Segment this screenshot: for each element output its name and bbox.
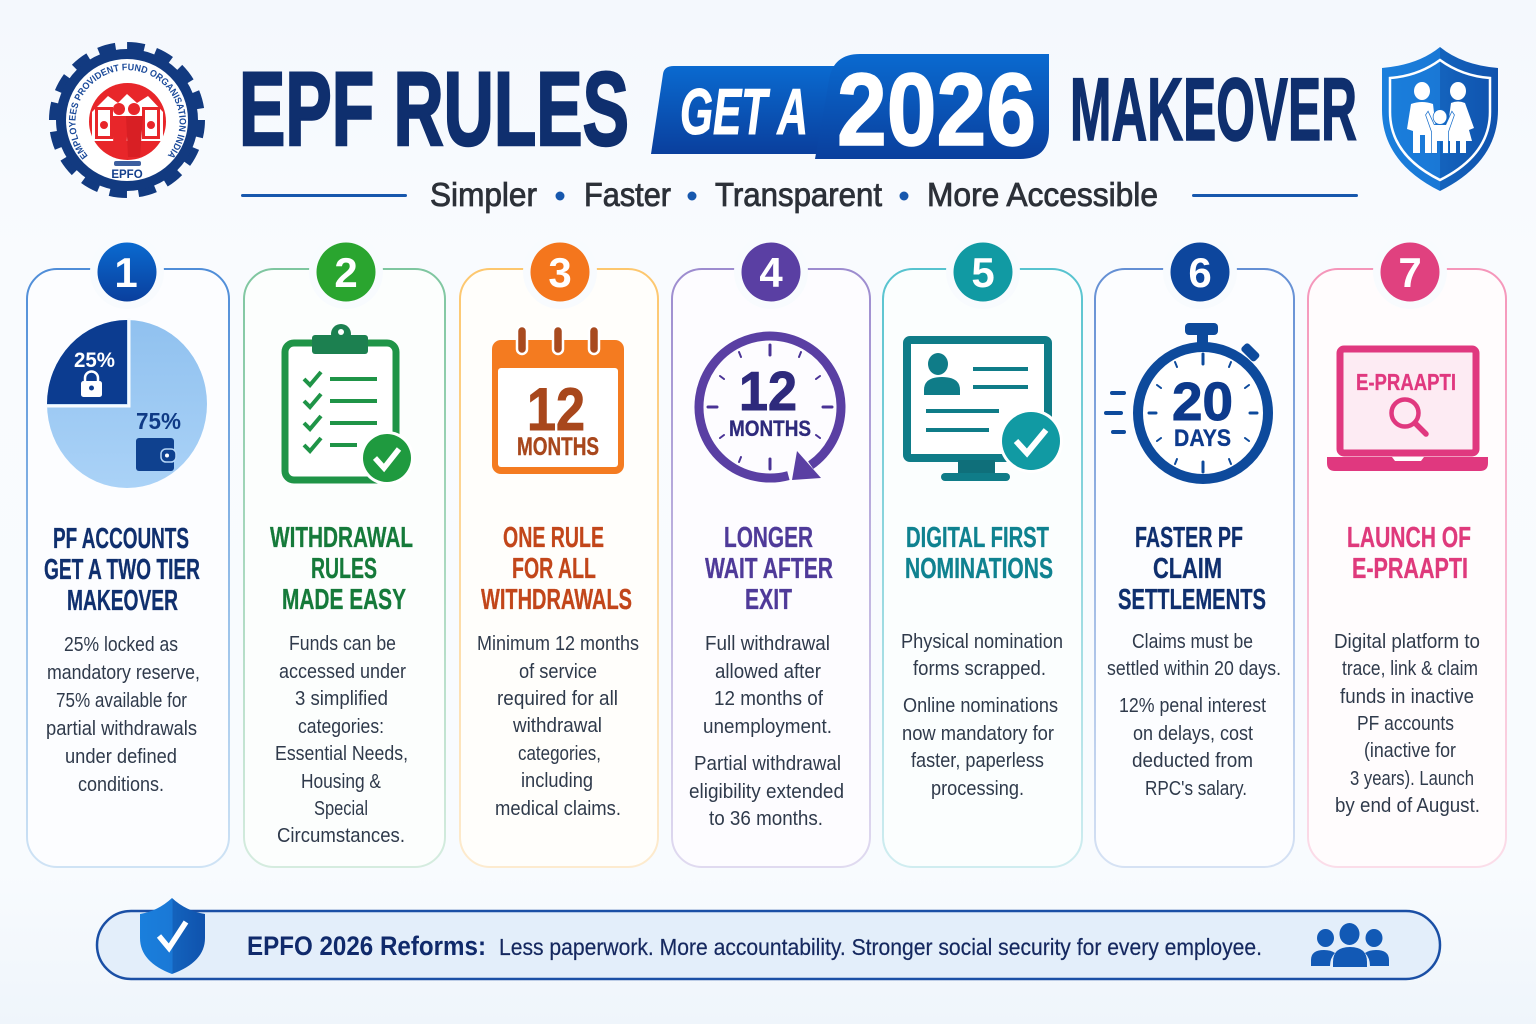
pie chart: 25% / 75%: 75%	[136, 408, 181, 434]
body text	[477, 632, 639, 820]
heading: RULES	[311, 553, 377, 585]
body text	[689, 632, 844, 830]
body text: Full withdrawal	[705, 632, 830, 655]
icon: stopwatch 20 days: DAYS	[1174, 425, 1231, 452]
heading: FOR ALL	[512, 553, 596, 585]
heading: NOMINATIONS	[905, 553, 1053, 585]
icon: stopwatch 20 days	[1106, 323, 1268, 479]
number badge 6: 6	[1188, 249, 1212, 296]
panel 1: two tier accounts	[27, 235, 229, 867]
icon: stopwatch 20 days: 20	[1172, 372, 1233, 432]
number badge 3: 3	[548, 249, 572, 296]
icon: clock 12 months: 12	[739, 360, 797, 422]
number badge 3	[530, 242, 590, 302]
panel 3: one rule	[460, 235, 658, 867]
heading	[481, 522, 632, 616]
banner text: Less paperwork. More accountability. Stronger social security for every employee.	[499, 934, 1262, 960]
body text	[1107, 630, 1281, 800]
body text: mandatory reserve,	[47, 661, 200, 684]
icon: clipboard checklist	[285, 324, 414, 485]
banner text	[247, 931, 1262, 961]
heading: E-PRAAPTI	[1352, 553, 1468, 585]
body text: Housing &	[301, 770, 381, 793]
body text: of service	[519, 660, 597, 683]
tagline: More Accessible	[927, 176, 1158, 213]
logo: EPFO gear emblem	[49, 42, 205, 198]
body text: including	[521, 769, 593, 792]
title badge: GET A 2026: GET A	[680, 75, 808, 148]
tagline: Transparent	[715, 176, 882, 213]
number badge 5: 5	[971, 249, 995, 296]
pie chart: 25% / 75%	[46, 318, 207, 488]
heading: EXIT	[745, 584, 792, 616]
body text: conditions.	[78, 773, 164, 796]
body text	[1334, 630, 1480, 817]
heading: MADE EASY	[282, 584, 406, 616]
body text: Partial withdrawal	[694, 752, 841, 775]
body text: PF accounts	[1357, 712, 1454, 735]
logo: EPFO gear emblem: EMPLOYEES PROVIDENT FUND ORGANISATION INDIA	[68, 64, 186, 160]
number badge 2: 2	[334, 249, 358, 296]
body text: 3 simplified	[295, 687, 388, 710]
body text: processing.	[931, 777, 1024, 800]
tagline: Simpler	[430, 176, 537, 213]
heading	[270, 522, 413, 616]
heading	[705, 522, 833, 616]
title badge: GET A 2026: 2026	[837, 52, 1036, 167]
icon: family shield	[1382, 47, 1498, 191]
body text: RPC's salary.	[1145, 777, 1247, 800]
body text: partial withdrawals	[46, 717, 197, 740]
icon: calendar 12 months: MONTHS	[517, 433, 599, 461]
panel 6: faster claim settlements	[1095, 235, 1294, 867]
body text: by end of August.	[1335, 794, 1480, 817]
heading: GET A TWO TIER	[44, 554, 200, 586]
body text: 3 years). Launch	[1350, 767, 1474, 790]
body text: accessed under	[279, 660, 406, 683]
heading: ONE RULE	[503, 522, 604, 554]
body text: deducted from	[1132, 749, 1253, 772]
body text: required for all	[497, 687, 618, 710]
heading: SETTLEMENTS	[1118, 584, 1266, 616]
icon: people group	[1311, 923, 1389, 967]
body text: Minimum 12 months	[477, 632, 639, 655]
body text: to 36 months.	[709, 807, 823, 830]
panel 5: digital first nominations	[883, 235, 1082, 867]
icon: calendar 12 months	[492, 326, 624, 474]
body text: settled within 20 days.	[1107, 657, 1281, 680]
tagline: Faster	[584, 176, 671, 213]
body text: Essential Needs,	[275, 742, 408, 765]
title badge: GET A 2026	[651, 52, 1049, 167]
body text: Physical nomination	[901, 630, 1063, 653]
number badge 4	[742, 242, 800, 302]
title: EPF RULES: EPF RULES	[239, 51, 629, 168]
body text: on delays, cost	[1133, 722, 1253, 745]
heading: LONGER	[724, 522, 813, 554]
body text: categories,	[518, 742, 601, 765]
body text: 25% locked as	[64, 633, 178, 656]
footer banner	[97, 898, 1440, 979]
body text: now mandatory for	[902, 722, 1054, 745]
number badge 4: 4	[759, 249, 783, 296]
banner text: EPFO 2026 Reforms:	[247, 931, 486, 961]
body text: withdrawal	[512, 714, 602, 737]
logo: EPFO gear emblem: EPFO	[111, 169, 143, 181]
panel 2: withdrawal rules	[244, 235, 445, 867]
icon: calendar 12 months: 12	[527, 376, 585, 443]
icon: laptop e-praapti search	[1327, 349, 1488, 471]
body text: 12 months of	[714, 687, 823, 710]
body text	[46, 633, 200, 796]
body text	[901, 630, 1063, 800]
heading	[1118, 522, 1266, 616]
body text: Special	[314, 797, 368, 820]
heading: WITHDRAWAL	[270, 522, 413, 554]
body text: Digital platform to	[1334, 630, 1480, 653]
heading	[44, 523, 200, 617]
heading: WITHDRAWALS	[481, 584, 632, 616]
body text: allowed after	[715, 660, 821, 683]
body text: Claims must be	[1132, 630, 1253, 653]
number badge 6	[1170, 242, 1230, 302]
heading: FASTER PF	[1135, 522, 1243, 554]
body text: categories:	[298, 715, 384, 738]
icon: shield check	[140, 898, 205, 974]
number badge 7	[1380, 242, 1440, 302]
body text: 12% penal interest	[1119, 694, 1266, 717]
body text: medical claims.	[495, 797, 621, 820]
heading: DIGITAL FIRST	[906, 522, 1049, 554]
icon: clock 12 months	[699, 336, 841, 480]
body text: trace, link & claim	[1342, 657, 1478, 680]
number badge 1: 1	[114, 249, 138, 296]
heading	[1347, 522, 1471, 585]
number badge 5	[954, 242, 1012, 302]
icon: monitor with nomination form	[907, 340, 1063, 481]
icon: laptop e-praapti search: E-PRAAPTI	[1356, 369, 1456, 395]
tagline	[241, 176, 1358, 213]
body text: 75% available for	[56, 689, 187, 712]
body text: Online nominations	[903, 694, 1058, 717]
body text	[275, 632, 408, 847]
pie chart: 25% / 75%: 25%	[74, 349, 115, 372]
body text: eligibility extended	[689, 780, 844, 803]
heading	[905, 522, 1053, 585]
heading: MAKEOVER	[67, 585, 178, 617]
number badge 1	[98, 242, 156, 302]
heading: CLAIM	[1153, 553, 1222, 585]
body text: unemployment.	[703, 715, 832, 738]
number badge 2	[316, 242, 376, 302]
body text: funds in inactive	[1340, 685, 1474, 708]
panel 7: launch of e-praapti	[1308, 235, 1506, 867]
number badge 7: 7	[1398, 249, 1422, 296]
icon: clock 12 months: MONTHS	[729, 416, 811, 441]
body text: Funds can be	[289, 632, 396, 655]
heading: LAUNCH OF	[1347, 522, 1471, 554]
body text: under defined	[65, 745, 177, 768]
heading: PF ACCOUNTS	[53, 523, 189, 555]
body text: forms scrapped.	[913, 657, 1046, 680]
heading: WAIT AFTER	[705, 553, 833, 585]
body text: Circumstances.	[277, 824, 405, 847]
panel 4: longer wait after exit	[672, 235, 870, 867]
body text: (inactive for	[1364, 739, 1456, 762]
body text: faster, paperless	[911, 749, 1044, 772]
